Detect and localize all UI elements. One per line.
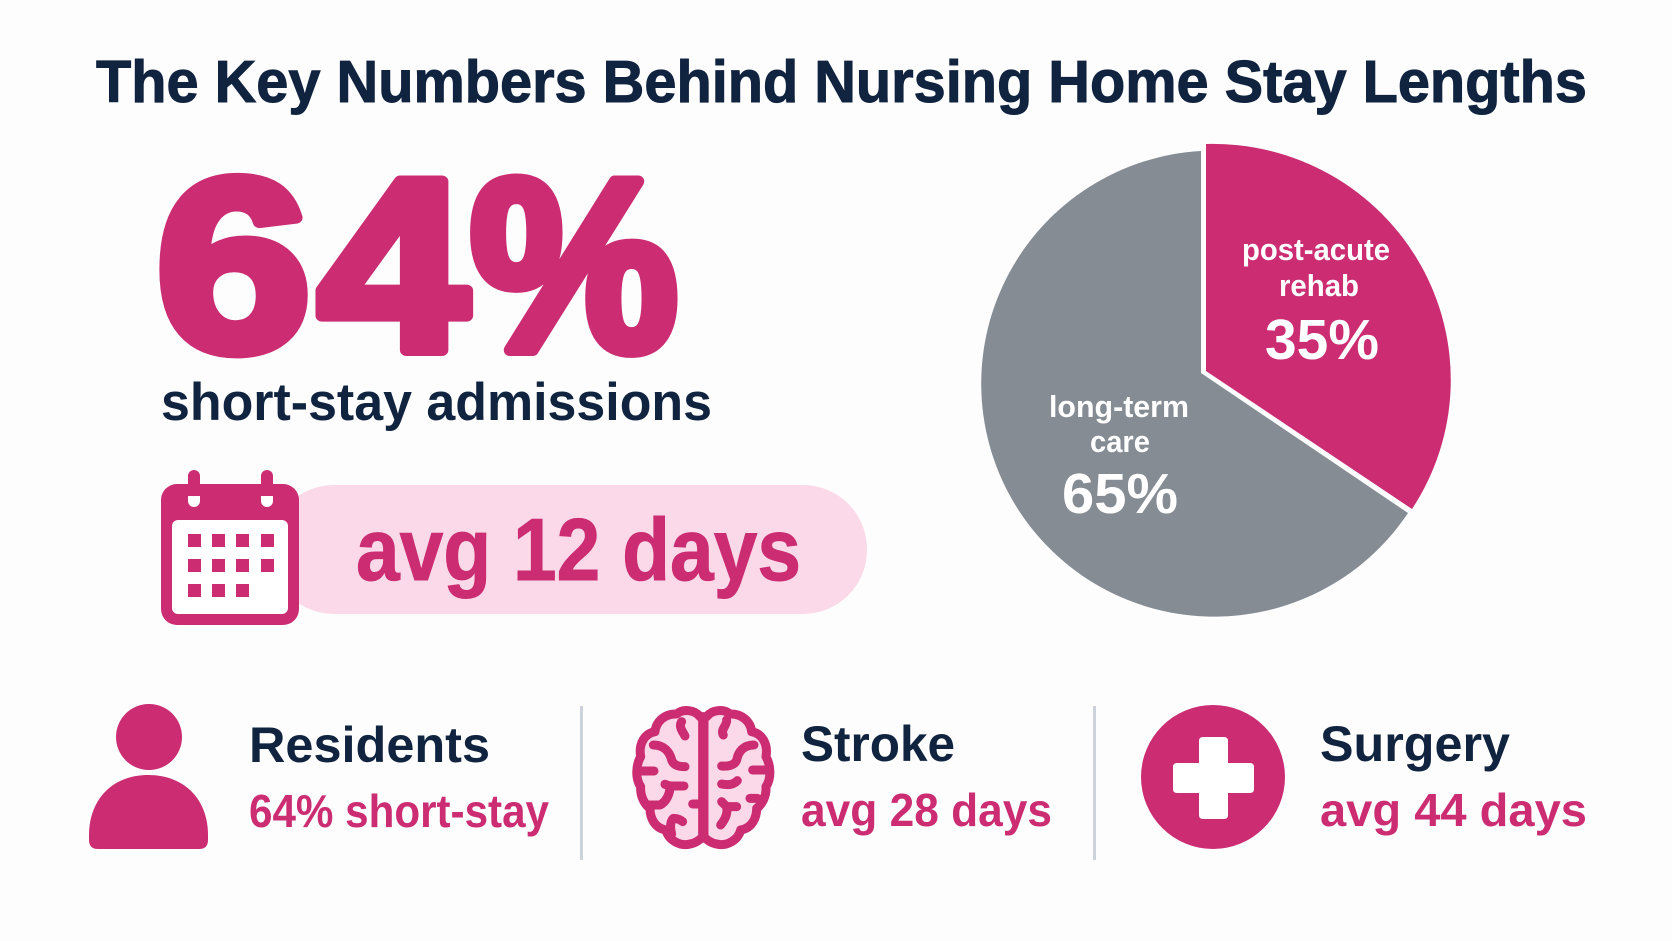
panel: surgery [1141, 705, 1587, 849]
big number 64%: % [470, 128, 678, 402]
average stay pill [270, 485, 867, 614]
icon: calendar [161, 470, 299, 625]
label: post-acute rehab [1242, 232, 1390, 372]
label: long-term care: care [1090, 424, 1150, 459]
label: long-term care: 65% [1062, 462, 1178, 526]
big number 64%: 6 [156, 128, 311, 402]
panel: residents [89, 704, 549, 849]
surgery value: avg 44 days [1320, 784, 1587, 836]
label: post-acute rehab: post-acute [1242, 232, 1390, 267]
big number 64%: 4 [318, 128, 468, 402]
residents value: 64% short-stay [249, 785, 549, 837]
stroke heading: Stroke [801, 716, 955, 772]
stroke value: avg 28 days [801, 784, 1052, 836]
panel: headline statistic [156, 128, 867, 625]
label: long-term care: long-term [1049, 389, 1189, 424]
label: post-acute rehab: 35% [1265, 308, 1379, 372]
icon: medical cross [1141, 705, 1285, 849]
icon: person [89, 704, 208, 849]
title: The Key Numbers Behind Nursing Home Stay Lengths [96, 49, 1587, 115]
slice: post-acute rehab 35% [1206, 144, 1451, 509]
avg 12 days text: avg 12 days [356, 500, 801, 599]
pie chart [981, 144, 1451, 617]
surgery heading: Surgery [1320, 716, 1510, 772]
panel: stroke [637, 711, 1052, 845]
residents heading: Residents [249, 717, 490, 773]
label: post-acute rehab: rehab [1279, 268, 1359, 303]
slice: long-term care 65% [981, 151, 1408, 617]
label: long-term care [1049, 389, 1189, 526]
icon: brain [637, 711, 770, 845]
short-stay admissions label: short-stay admissions [161, 373, 712, 432]
